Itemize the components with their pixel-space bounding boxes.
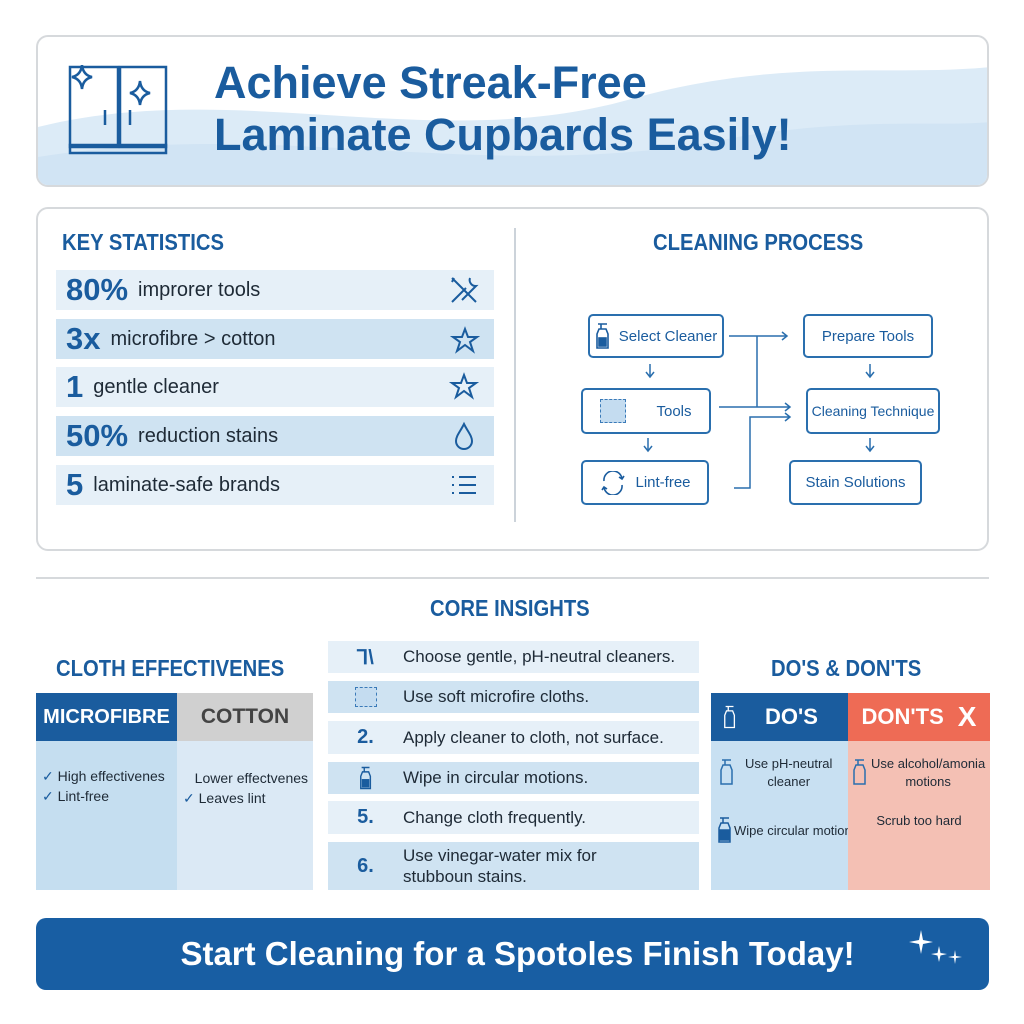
flow: stain solutions: Stain Solutions <box>805 474 906 491</box>
insight 3 <box>328 721 699 754</box>
insight 6 <box>328 842 699 890</box>
flowchart <box>644 331 874 489</box>
insight 6: stubboun stains. <box>403 867 527 886</box>
cotton column <box>177 693 313 890</box>
stat row 4: 50% <box>66 418 128 453</box>
don'ts column <box>848 693 990 890</box>
icon: sparkles <box>909 930 962 964</box>
heading: cloth effectiveness: CLOTH EFFECTIVENES <box>56 655 284 681</box>
header panel <box>36 35 989 187</box>
insight 4: Wipe in circular motions. <box>403 768 588 787</box>
insight 5 <box>328 801 699 834</box>
do's column <box>711 693 848 890</box>
do's and don'ts table <box>711 693 990 890</box>
insight 3: Apply cleaner to cloth, not surface. <box>403 728 664 746</box>
stat row 3 <box>56 367 494 407</box>
flow: cleaning technique: Cleaning Technique <box>812 403 934 419</box>
insight 2: Use soft microfire cloths. <box>403 687 589 706</box>
insight 4 <box>328 762 699 794</box>
stat row 3: gentle cleaner <box>93 376 219 398</box>
insight 5: Change cloth frequently. <box>403 808 586 826</box>
flow: prepare tools <box>803 314 933 358</box>
heading: cleaning process: CLEANING PROCESS <box>653 229 863 255</box>
insights list <box>328 641 699 890</box>
cotton column: ✓ Leaves lint <box>183 790 266 806</box>
title: Achieve Streak-Free <box>214 57 647 108</box>
microfibre column <box>36 693 177 890</box>
do's column: cleaner <box>767 774 810 789</box>
insight 3: 2. <box>357 726 374 748</box>
flow: cleaning technique <box>806 388 940 434</box>
flow: select cleaner: Select Cleaner <box>619 328 717 344</box>
don'ts column: X <box>958 701 976 732</box>
cloth comparison table <box>36 693 313 890</box>
flow: prepare tools: Prepare Tools <box>822 328 914 344</box>
footer call to action: Start Cleaning for a Spotoles Finish Today! <box>180 935 855 972</box>
heading: core insights: CORE INSIGHTS <box>430 595 590 621</box>
insight 6: 6. <box>357 854 374 876</box>
don'ts column: Scrub too hard <box>876 813 962 828</box>
flow: tools: Tools <box>656 402 692 420</box>
stats list <box>56 270 494 505</box>
flow: stain solutions <box>789 460 922 505</box>
heading: do's & don'ts: DO'S & DON'TS <box>771 655 921 681</box>
stat row 1: improrer tools <box>138 278 260 300</box>
arrows <box>644 331 874 489</box>
insight 1: Choose gentle, pH-neutral cleaners. <box>403 647 675 666</box>
stat row 5: 5 <box>66 467 83 502</box>
flow: tools <box>581 388 711 434</box>
flow: lint-free: Lint-free <box>635 474 691 491</box>
wave background <box>38 68 987 185</box>
microfibre column: ✓ Lint-free <box>42 788 109 804</box>
stat row 2: 3x <box>66 321 100 356</box>
stat row 2: microfibre > cotton <box>110 328 276 350</box>
do's column: Use pH-neutral <box>745 756 832 771</box>
title <box>214 57 792 160</box>
insight 2 <box>328 681 699 713</box>
insight 1 <box>328 641 699 673</box>
flow: lint-free <box>581 460 709 505</box>
icon: cupboard <box>68 65 168 154</box>
stat row 4 <box>56 416 494 456</box>
don'ts column: motions <box>905 774 951 789</box>
do's column: Wipe circular motions <box>734 822 858 838</box>
title: Laminate Cupbards Easily! <box>214 109 792 160</box>
stat row 3: 1 <box>66 369 83 404</box>
heading: key statistics: KEY STATISTICS <box>62 229 224 255</box>
stat row 5 <box>56 465 494 505</box>
flow: select cleaner <box>588 314 724 358</box>
stat row 4: reduction stains <box>138 424 278 446</box>
insight 6: Use vinegar-water mix for <box>403 846 597 865</box>
do's column: DO'S <box>765 704 818 729</box>
stat row 1: 80% <box>66 272 128 307</box>
don'ts column: DON'TS <box>862 704 944 729</box>
insight 5: 5. <box>357 806 374 828</box>
panel: statistics & process <box>36 207 989 551</box>
cotton column: Lower effectvenes <box>195 770 308 786</box>
footer call to action <box>36 918 989 990</box>
cotton column: COTTON <box>201 705 289 728</box>
microfibre column: ✓ High effectivenes <box>42 768 165 784</box>
microfibre column: MICROFIBRE <box>43 706 170 728</box>
don'ts column: Use alcohol/amonia <box>871 756 985 771</box>
stat row 5: laminate-safe brands <box>93 474 280 496</box>
stat row 2 <box>56 319 494 359</box>
stat row 1 <box>56 270 494 310</box>
insight 1: ⅂\ <box>357 646 374 668</box>
